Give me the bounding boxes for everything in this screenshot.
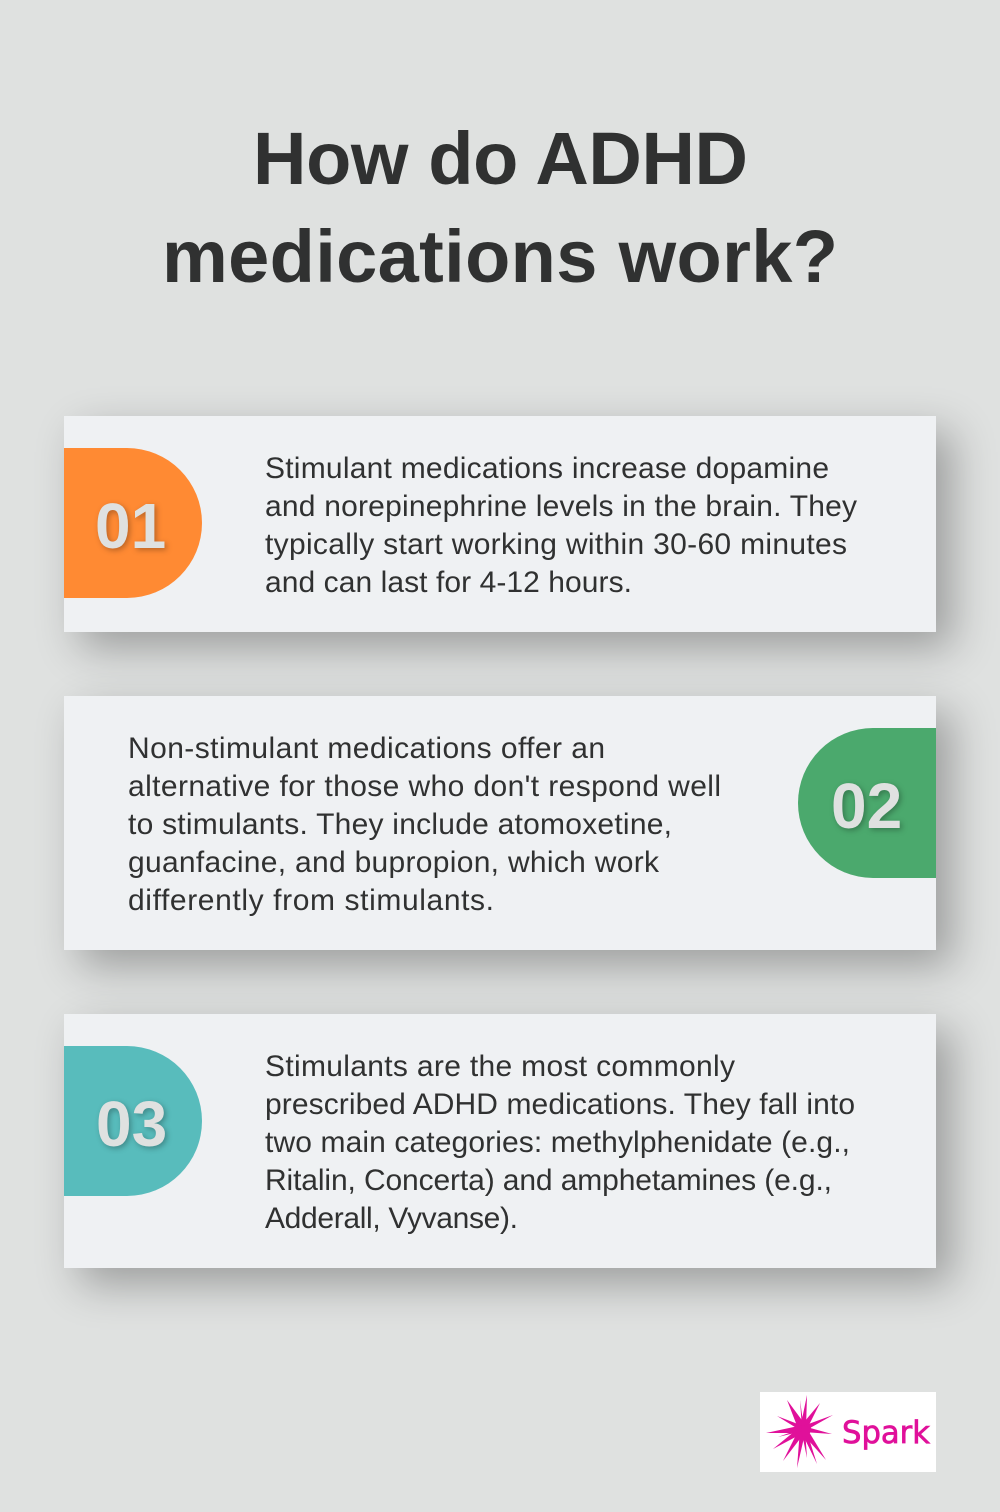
text: stimulant categories: Adderall, Vyvanse). — [265, 1202, 518, 1235]
panel: non-stimulant medications — [64, 696, 936, 950]
wordmark: Spark — [842, 1415, 930, 1451]
badge: 01 — [64, 448, 202, 598]
text: stimulant action: Stimulant medications increase dopamine — [265, 452, 829, 485]
text: non-stimulant medications: to stimulants. They include atomoxetine, — [128, 808, 672, 841]
panel: stimulant action — [64, 416, 936, 632]
text: stimulant categories: prescribed ADHD medications. They fall into — [265, 1088, 855, 1121]
text: stimulant categories: two main categories: methylphenidate (e.g., — [265, 1126, 850, 1159]
text: non-stimulant medications: guanfacine, and bupropion, which work — [128, 846, 660, 879]
badge: 03 — [64, 1046, 202, 1196]
badge: 02 — [798, 728, 936, 878]
title: How do ADHD — [253, 117, 748, 200]
text: non-stimulant medications — [128, 732, 721, 917]
icon: spark starburst — [766, 1395, 833, 1468]
title — [162, 117, 838, 298]
title: medications work? — [162, 215, 838, 298]
text: stimulant categories: Ritalin, Concerta) and amphetamines (e.g., — [265, 1164, 832, 1197]
text: non-stimulant medications: alternative for those who don't respond well — [128, 770, 721, 803]
badge: 03: 03 — [96, 1088, 167, 1160]
text: stimulant action — [265, 452, 857, 599]
text: non-stimulant medications: Non-stimulant medications offer an — [128, 732, 605, 765]
panel: stimulant categories — [64, 1014, 936, 1268]
text: stimulant action: and norepinephrine levels in the brain. They — [265, 490, 857, 523]
logo: Spark — [760, 1392, 936, 1472]
text: stimulant action: typically start working within 30-60 minutes — [265, 528, 847, 561]
text: stimulant categories — [265, 1050, 855, 1235]
text: non-stimulant medications: differently from stimulants. — [128, 884, 494, 917]
badge: 02: 02 — [831, 770, 902, 842]
text: stimulant categories: Stimulants are the most commonly — [265, 1050, 735, 1083]
text: stimulant action: and can last for 4-12 hours. — [265, 566, 632, 599]
badge: 01: 01 — [95, 490, 166, 562]
